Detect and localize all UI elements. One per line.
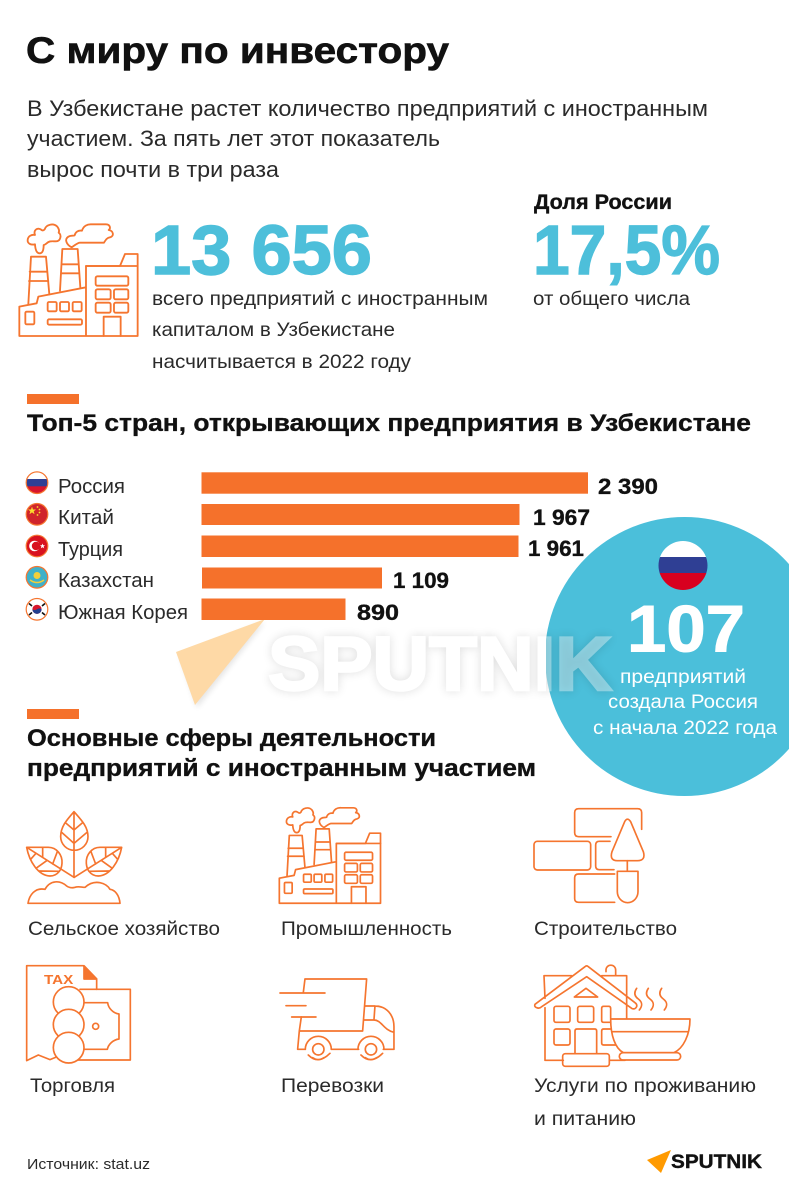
label: construction: Строительство <box>534 918 677 940</box>
label: accommodation and food <box>534 1075 756 1130</box>
watermark: sputnik: SPUTNIK <box>268 622 612 707</box>
stat: share of Russia: от общего числа <box>533 288 690 310</box>
row: Kazakhstan: Казахстан <box>58 570 154 592</box>
stat: total enterprises: насчитывается в 2022 году <box>152 351 411 373</box>
icon: Russian flag <box>658 541 708 591</box>
label: accommodation and food: Услуги по проживанию <box>534 1075 756 1097</box>
intro text: вырос почти в три раза <box>27 157 280 182</box>
icon: factory (industry) <box>279 808 381 903</box>
stat: share of Russia: 17,5% <box>533 211 720 289</box>
icon: tax and coins (trade): TAX <box>44 972 73 987</box>
logo: sputnik: SPUTNIK <box>671 1151 762 1173</box>
stat: total enterprises <box>151 211 488 373</box>
label: trade: Торговля <box>30 1075 115 1097</box>
heading: top-5 countries: Топ-5 стран, открывающих предприятия в Узбекистане <box>27 410 751 437</box>
row: South Korea: Южная Корея <box>58 602 188 624</box>
intro text <box>27 96 708 182</box>
row: Russia: Россия <box>58 476 125 498</box>
row: Kazakhstan: 1 109 <box>393 568 449 593</box>
row: South Korea <box>26 598 399 625</box>
callout: 107 enterprises created by Russia: с начала 2022 года <box>593 718 777 739</box>
watermark: sputnik: SPUTNIK <box>268 622 612 707</box>
source: Источник: stat.uz <box>27 1156 150 1173</box>
label: industry: Промышленность <box>281 918 452 940</box>
row: Turkey: Турция <box>58 539 123 561</box>
stat: total enterprises: 13 656 <box>151 211 372 289</box>
heading: main activities <box>27 725 536 782</box>
bar chart: top-5 countries <box>26 472 658 625</box>
icon: factory <box>19 224 138 336</box>
row: Russia <box>26 471 658 494</box>
icon: plant (agriculture) <box>27 812 122 903</box>
icon: house and bowl (accommodation and food) <box>535 965 690 1066</box>
row: Kazakhstan <box>26 566 448 589</box>
section marker: activities <box>27 709 79 719</box>
title: С миру по инвестору <box>26 30 449 71</box>
stat: share of Russia: Доля России <box>534 191 672 214</box>
icon: truck (transport) <box>280 979 394 1060</box>
row: China <box>26 502 590 526</box>
heading: main activities: предприятий с иностранным участием <box>27 755 536 782</box>
icon: tax and coins (trade) <box>27 966 130 1063</box>
row: South Korea: 890 <box>357 600 399 625</box>
stat: total enterprises: капиталом в Узбекистане <box>152 319 395 341</box>
stat: total enterprises: всего предприятий с иностранным <box>152 288 488 310</box>
stat: share of Russia <box>533 191 720 310</box>
watermark: sputnik: SPUTNIK <box>268 622 612 707</box>
label: agriculture: Сельское хозяйство <box>28 918 220 940</box>
watermark: sputnik wing <box>176 619 265 708</box>
intro text: В Узбекистане растет количество предприятий с иностранным <box>27 96 708 121</box>
section marker: top-5 <box>27 394 79 404</box>
heading: main activities: Основные сферы деятельности <box>27 725 436 752</box>
label: transport: Перевозки <box>281 1075 384 1097</box>
row: Turkey: 1 961 <box>528 536 584 561</box>
row: Russia: 2 390 <box>598 474 658 499</box>
callout: 107 enterprises created by Russia: создала Россия <box>608 692 758 713</box>
callout: 107 enterprises created by Russia: 107 <box>627 592 745 666</box>
intro text: участием. За пять лет этот показатель <box>27 126 440 151</box>
row: China: Китай <box>58 507 114 529</box>
row: Turkey <box>26 535 584 561</box>
callout: 107 enterprises created by Russia <box>545 517 789 796</box>
callout: 107 enterprises created by Russia: предприятий <box>620 667 746 688</box>
row: China: 1 967 <box>533 505 590 530</box>
label: accommodation and food: и питанию <box>534 1108 636 1130</box>
icon: bricks and trowel (construction) <box>534 809 644 903</box>
